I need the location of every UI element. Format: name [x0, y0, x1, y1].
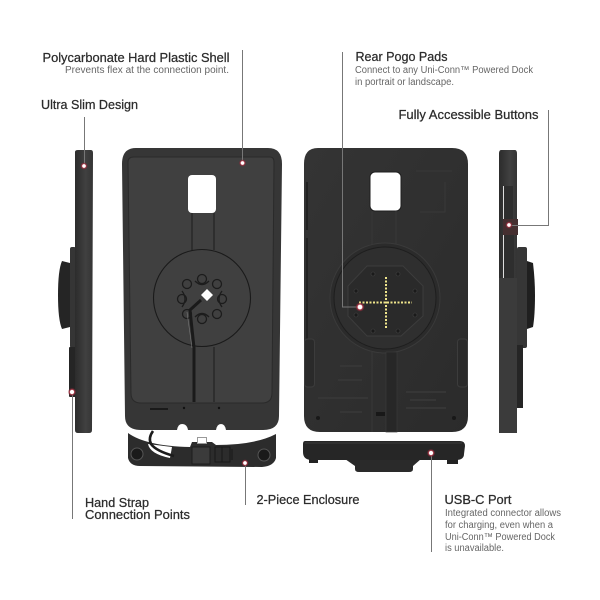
device: front inside of shell: [122, 148, 282, 430]
enclosure screw right: [258, 449, 270, 461]
label: rear pogo: [355, 50, 534, 88]
marker: hand strap: [68, 388, 76, 396]
label: buttons: Fully Accessible Buttons: [398, 108, 538, 122]
leader: 2-piece: [244, 463, 246, 505]
marker: pogo: [356, 302, 364, 312]
marker: 2-piece: [242, 460, 248, 466]
label: rear pogo: Connect to any Uni-Conn™ Powered Dock: [355, 65, 534, 76]
label: usb-c: Integrated connector allows: [445, 508, 561, 519]
label: hand strap: Connection Points: [85, 508, 190, 522]
leader: rear pogo: [342, 52, 360, 307]
leader: polycarbonate: [242, 50, 244, 163]
label: usb-c: Uni-Conn™ Powered Dock: [445, 532, 556, 543]
mounting rosette: [178, 274, 226, 324]
octagon screws: [354, 272, 417, 333]
label: usb-c: [444, 493, 561, 554]
mounting circle: [154, 250, 250, 346]
leader: ultra slim: [84, 117, 86, 166]
center diamond: [201, 289, 213, 301]
leader: buttons: [510, 110, 548, 226]
marker: ultra slim: [80, 162, 88, 170]
label: rear pogo: Rear Pogo Pads: [356, 50, 448, 64]
center ridge: [386, 352, 397, 432]
rear circular plate: [330, 243, 440, 353]
device: bottom connector piece: [128, 431, 276, 467]
label: usb-c: USB-C Port: [444, 493, 512, 507]
marker: buttons: [506, 222, 512, 228]
leader: usb-c: [430, 453, 432, 552]
label: polycarbonate: Polycarbonate Hard Plastic Shell: [42, 51, 230, 65]
label: polycarbonate: [42, 51, 230, 76]
label: usb-c: for charging, even when a: [445, 520, 553, 531]
leader: hand strap: [72, 392, 74, 519]
rear camera window: [370, 172, 401, 211]
device: right side view: [499, 150, 535, 433]
label: hand strap: Hand Strap: [85, 496, 149, 510]
label: ultra slim: Ultra Slim Design: [41, 98, 138, 112]
label: rear pogo: in portrait or landscape.: [355, 77, 454, 88]
hand strap grips: [304, 339, 468, 387]
label: 2-piece: 2-Piece Enclosure: [256, 493, 360, 507]
pogo pads: [359, 277, 412, 329]
label: usb-c: is unavailable.: [445, 543, 504, 554]
usb-c connector tip: [198, 438, 206, 444]
device: rear of shell: [304, 148, 468, 432]
device: left side view: [58, 150, 93, 433]
marker: polycarbonate: [239, 160, 246, 166]
octagon dock plate: [348, 266, 423, 336]
marker: usb: [427, 449, 435, 457]
device: bottom edge view: [303, 441, 465, 472]
flex cable: [150, 431, 174, 456]
enclosure screw left: [131, 448, 143, 460]
label: hand strap: [85, 496, 190, 522]
camera window: [188, 175, 216, 213]
internal cable: [190, 300, 201, 402]
label: polycarbonate: Prevents flex at the connection point.: [65, 65, 229, 76]
